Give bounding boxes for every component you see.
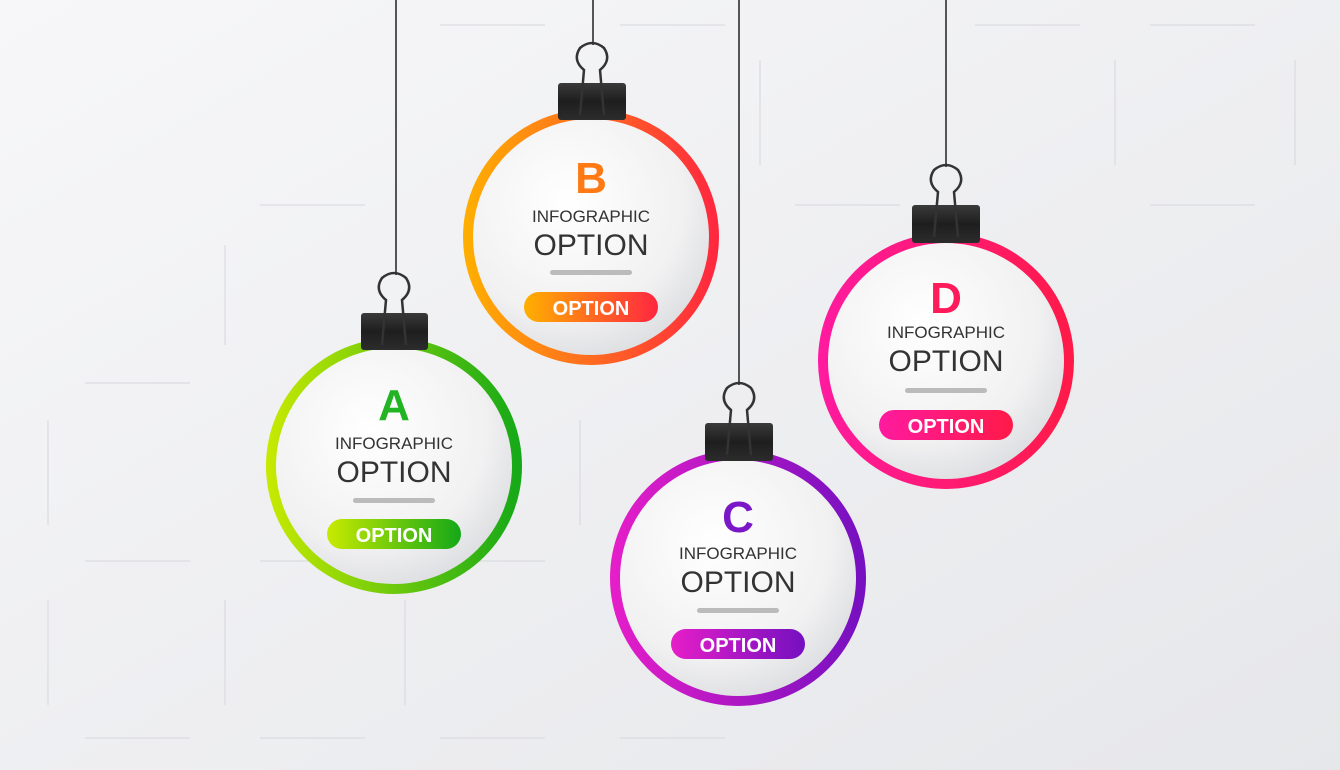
icon: binder clip D <box>912 165 980 243</box>
strings <box>396 0 946 385</box>
ornament D: OPTION <box>888 345 1004 378</box>
ornament A <box>266 273 522 594</box>
ornament C: OPTION <box>680 566 796 599</box>
ornament B: OPTION <box>553 298 629 320</box>
icon: binder clip B <box>558 43 626 120</box>
ornament B: OPTION <box>533 229 649 262</box>
icon: binder clip C <box>705 383 773 461</box>
ornament D: INFOGRAPHIC <box>887 323 1005 342</box>
ornament A: INFOGRAPHIC <box>335 434 453 453</box>
ornament D: D <box>930 274 962 323</box>
ornament C: INFOGRAPHIC <box>679 544 797 563</box>
ornament A: OPTION <box>356 525 432 547</box>
ornament B: INFOGRAPHIC <box>532 207 650 226</box>
ornament D <box>818 165 1074 489</box>
icon: binder clip A <box>361 273 428 350</box>
ornament B <box>463 43 719 365</box>
ornament A: A <box>378 381 410 430</box>
ornament A: OPTION <box>336 456 452 489</box>
ornament C <box>610 383 866 706</box>
ornament B: B <box>575 154 607 203</box>
ornament D: OPTION <box>908 416 984 438</box>
ornament C: OPTION <box>700 635 776 657</box>
ornament C: C <box>722 493 754 542</box>
